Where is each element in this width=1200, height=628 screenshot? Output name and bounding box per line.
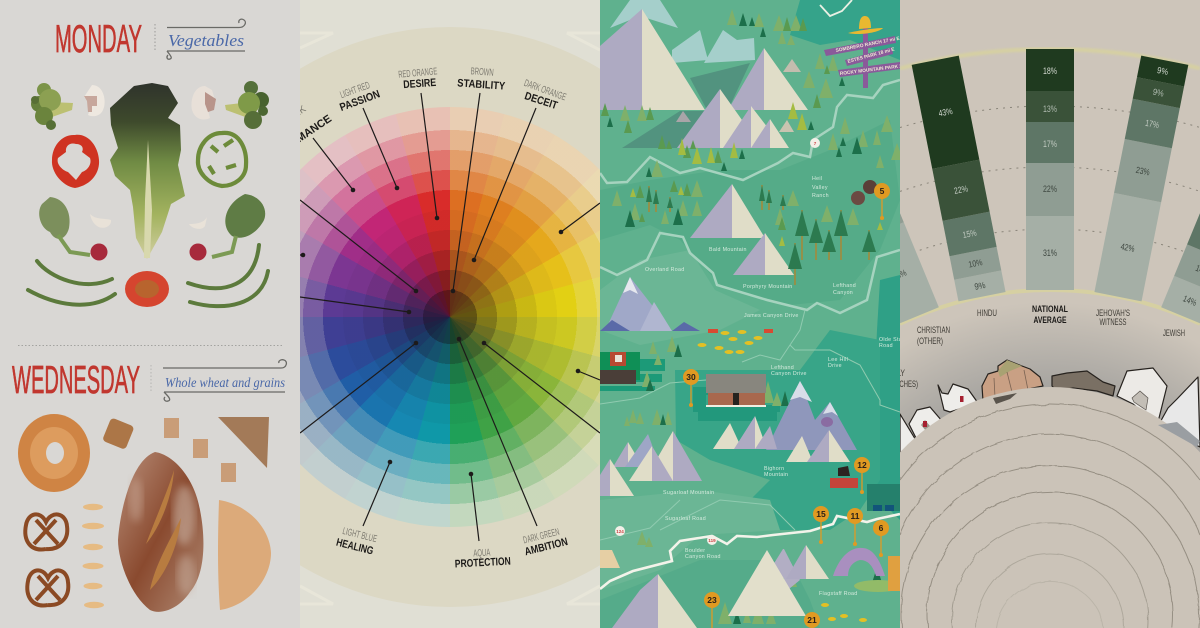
denomination labels: JEHOVAH'S	[1096, 308, 1130, 319]
labels around the wheel	[259, 66, 569, 570]
map labels: Canyon Road	[685, 554, 721, 560]
denomination labels: WITNESS	[1100, 317, 1126, 328]
map labels: Road	[879, 343, 893, 349]
triangle of grains	[218, 417, 269, 468]
bar: National average: 13%	[1043, 104, 1057, 114]
denomination labels: JEWISH	[1163, 328, 1185, 339]
road badges: 7	[814, 141, 817, 146]
shadow slopes	[622, 63, 750, 148]
roads	[600, 80, 900, 589]
signpost with sombrero: SOMBRERO RANCH 17 mi E	[835, 36, 900, 54]
bagel	[18, 414, 90, 492]
pretzels	[25, 514, 68, 605]
subheading: Whole wheat and grains with flourish: Whole wheat and grains	[165, 376, 285, 391]
ground with tree rings	[900, 387, 1200, 628]
numbered location pins: 5	[880, 186, 885, 196]
labels around the wheel: BROWN	[470, 66, 494, 79]
numbered location pins: 11	[850, 511, 860, 521]
numbered location pins: 21	[807, 615, 817, 625]
leader lines with dots	[300, 93, 600, 541]
orange building	[888, 556, 900, 591]
map labels: James Canyon Drive	[744, 313, 799, 319]
numbered location pins: 6	[879, 523, 884, 533]
stone arch	[833, 548, 885, 576]
signpost with sombrero	[824, 16, 917, 88]
labels around the wheel: DARK ORANGE	[522, 78, 568, 103]
denomination labels: NATIONAL	[1032, 304, 1068, 315]
denomination labels: (OTHER)	[917, 336, 943, 347]
meadow and trees by the arch	[854, 580, 902, 592]
cracker	[102, 417, 135, 450]
map labels: Drive	[828, 363, 842, 369]
map labels: Bald Mountain	[709, 247, 747, 253]
broccoli right	[225, 81, 269, 129]
bar: Hindu: 9%	[974, 280, 986, 292]
road badges: 124	[616, 529, 624, 534]
map labels: Sugarloaf Mountain	[663, 490, 714, 496]
labels around the wheel: DARK GREEN	[522, 527, 561, 546]
panel: trail map	[600, 0, 900, 628]
map labels: Porphyry Mountain	[743, 284, 793, 290]
bar: National average	[1026, 49, 1074, 290]
tomato half	[125, 271, 169, 307]
signpost with sombrero: ESTES PARK 18 mi E	[847, 46, 896, 65]
lettuce leaf	[110, 83, 185, 259]
labels around the wheel: HEALING	[335, 537, 375, 558]
garlic cloves	[90, 214, 207, 229]
numbered location pins	[683, 183, 890, 628]
bar: Jehovah's Witness: 23%	[1135, 165, 1151, 177]
map labels: Lee Hill	[828, 357, 848, 363]
numbered location pins: 30	[686, 372, 696, 382]
labels around the wheel: LIGHT BLUE	[341, 526, 378, 545]
numbered location pins: 12	[857, 460, 867, 470]
bar: Jehovah's Witness: 42%	[1120, 241, 1136, 254]
icy background peaks	[610, 0, 755, 63]
road badges	[615, 138, 820, 545]
map labels: Canyon Drive	[771, 371, 807, 377]
labels around the wheel: STABILITY	[457, 77, 506, 93]
dotted divider	[18, 344, 284, 346]
map labels	[645, 176, 909, 597]
heading: Wednesday: WEDNESDAY	[12, 359, 140, 402]
numbered location pins: 23	[707, 595, 717, 605]
denomination labels: AVERAGE	[1034, 315, 1066, 326]
labels around the wheel: LIGHT RED	[339, 80, 372, 101]
subheading: Vegetables with flourish	[155, 19, 245, 59]
skyline of places of worship	[900, 360, 1200, 454]
heading: Monday: MONDAY	[55, 18, 142, 61]
green beans	[28, 245, 268, 306]
denomination labels: HINDU	[977, 308, 997, 319]
log cabin	[706, 374, 766, 407]
mountains, lower map	[600, 277, 857, 628]
bar: National average: 31%	[1043, 248, 1057, 258]
pita half	[218, 500, 271, 610]
radish left with leaf	[39, 197, 107, 260]
corner ornaments	[300, 33, 600, 604]
subheading: Vegetables with flourish: Vegetables	[168, 31, 244, 50]
bar: Jehovah's Witness: 9%	[1156, 65, 1169, 77]
bar: National average: 17%	[1043, 139, 1057, 149]
bar: Hindu: 10%	[968, 257, 983, 270]
bar: Jewish	[1161, 84, 1200, 326]
map labels: Lefthand	[771, 365, 794, 371]
labels around the wheel: AQUA	[473, 548, 491, 559]
broccoli left	[31, 83, 73, 130]
bar: Hindu	[912, 56, 1006, 301]
red bell pepper ring	[52, 135, 99, 188]
labels around the wheel: DESIRE	[403, 77, 437, 91]
bar: Hindu: 22%	[953, 183, 969, 196]
numbered location pins: 15	[816, 509, 826, 519]
denomination labels	[881, 304, 1185, 390]
bar: Hindu: 15%	[962, 228, 977, 240]
tall pines	[646, 185, 876, 285]
map labels: Sugarloaf Road	[665, 516, 706, 522]
radial chart arcs and grid	[900, 49, 1200, 628]
bread loaf	[118, 452, 203, 612]
map labels: Canyon	[833, 290, 853, 296]
wheel backing disc	[160, 27, 740, 607]
radish right with leaf	[190, 194, 265, 260]
green bell pepper ring	[198, 133, 246, 186]
map labels: Overland Road	[645, 267, 685, 273]
forest trees	[601, 9, 903, 624]
denomination labels: CHRISTIAN	[917, 325, 950, 336]
labels around the wheel: PASSION	[338, 88, 382, 114]
bar: Jehovah's Witness: 17%	[1144, 118, 1160, 130]
rotini pasta	[82, 504, 104, 608]
bar: Christian (other)	[803, 84, 939, 326]
wildlife: turkeys, ram, dog	[821, 180, 877, 488]
map labels: Lefthand	[833, 283, 856, 289]
bar: National average: 22%	[1043, 184, 1057, 194]
mountains, upper map	[600, 9, 808, 275]
road badges: 119	[708, 538, 716, 543]
map labels: Ranch	[812, 193, 829, 199]
map labels: Heil	[812, 176, 822, 182]
map labels: Bighorn	[764, 466, 784, 472]
labels around the wheel: AMBITION	[523, 536, 569, 558]
small cereal squares	[164, 418, 236, 482]
mushrooms	[84, 85, 216, 119]
map labels: Boulder	[685, 548, 705, 554]
labels around the wheel: DECEIT	[523, 90, 559, 112]
labels around the wheel: PROTECTION	[455, 556, 511, 570]
labels around the wheel: RED ORANGE	[398, 66, 438, 81]
green farmhouse	[600, 352, 640, 384]
terrain patches	[600, 0, 900, 628]
map labels: Mountain	[764, 472, 788, 478]
panel: weekly food poster	[0, 0, 300, 628]
bar: Jehovah's Witness	[1094, 56, 1188, 301]
panel: color wheel	[300, 0, 600, 628]
tent	[600, 550, 620, 568]
wildflowers	[698, 329, 867, 622]
map labels: Valley	[812, 185, 828, 191]
color wheel rings	[240, 107, 660, 527]
subheading: Whole wheat and grains with flourish	[151, 360, 286, 401]
bar: Jehovah's Witness: 9%	[1152, 87, 1165, 99]
teal town hall	[867, 484, 900, 511]
bar: Hindu: 43%	[938, 106, 953, 119]
bar: National average: 18%	[1043, 66, 1057, 76]
panel: religion stacked bar chart	[900, 0, 1200, 628]
map labels: Flagstaff Road	[819, 591, 858, 597]
